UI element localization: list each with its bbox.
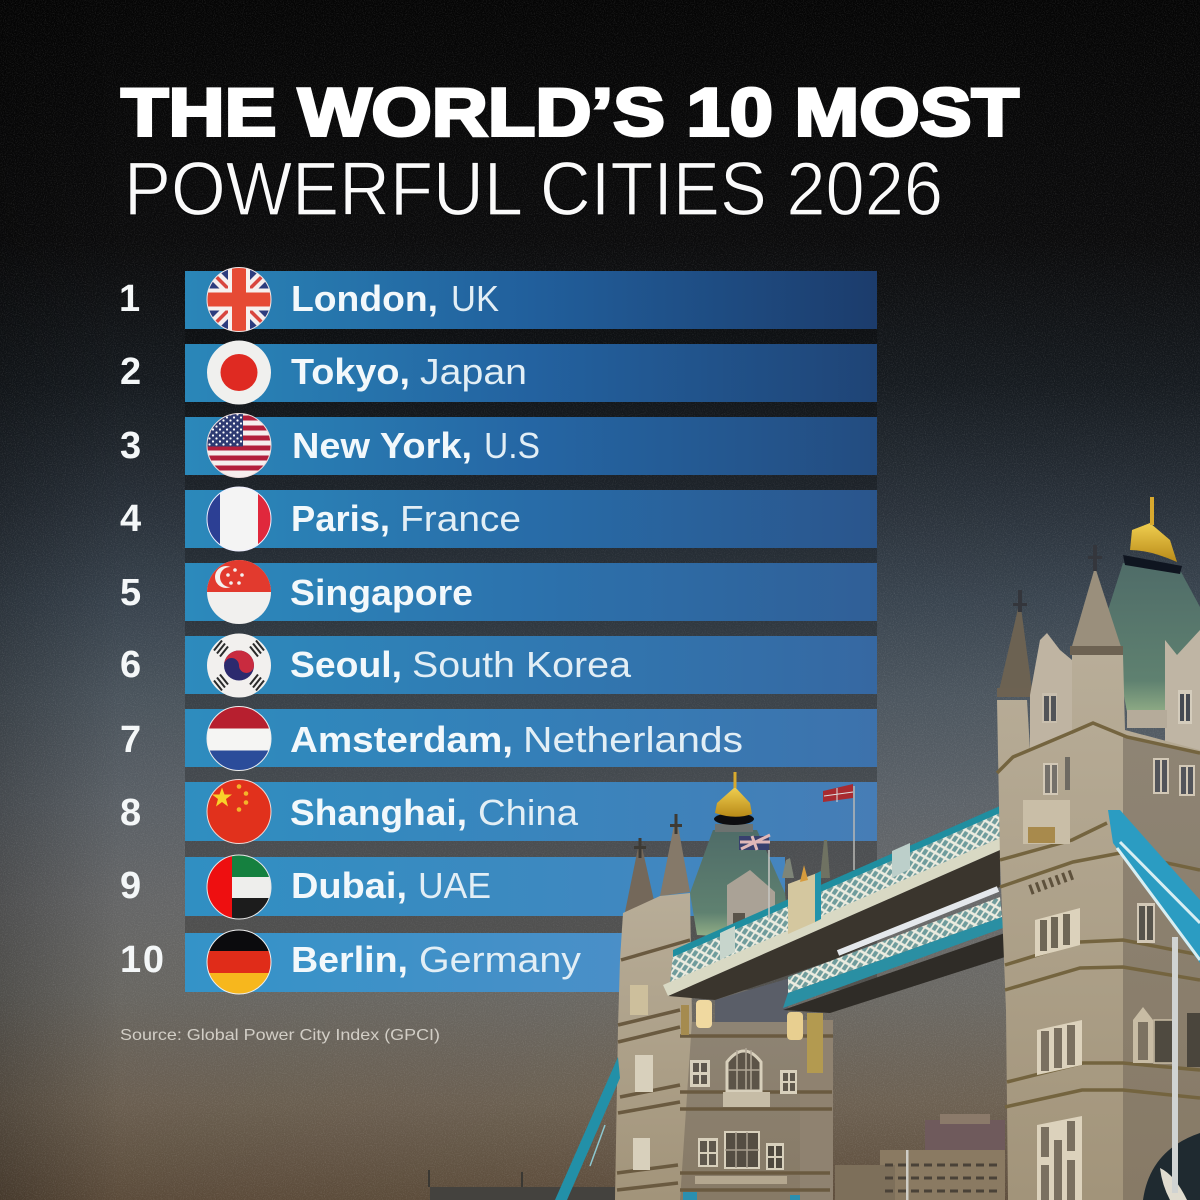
right tower green roof [1108,563,1200,720]
right tower lower windows [1035,903,1200,1200]
upper walkway [663,806,1000,1000]
row 8 Shanghai [120,780,579,844]
row 4 Paris: Paris, [291,498,390,539]
row 5 Singapore [120,560,473,624]
left tower small spires [625,814,830,912]
row 2 Tokyo [120,340,527,404]
row 4 Paris: 4 [120,498,141,540]
right tower spires [997,545,1123,697]
illustration: Tower Bridge [429,497,1200,1200]
row 3 New York: U.S [484,425,540,466]
right tower body [997,655,1200,1200]
row 7 Amsterdam: Netherlands [523,719,743,760]
title line 2: POWERFUL CITIES 2026 [124,147,943,232]
flag: United Arab Emirates [207,855,271,919]
shadow band behind bars [185,272,877,990]
row 2 Tokyo: 2 [120,351,141,393]
row 3 New York: 3 [120,425,141,467]
source note: Source: Global Power City Index (GPCI) [120,1027,440,1044]
row 7 Amsterdam: Amsterdam, [290,719,513,760]
panel: ranked list [119,266,743,994]
left tower corner turret [615,893,692,1200]
flag: United States [207,414,271,478]
right tower darker face [1123,737,1200,1200]
row 9 Dubai: Dubai, [291,865,407,906]
left tower masonry panel [630,985,648,1015]
left tower corner column [800,1020,833,1200]
row 3 New York [120,414,540,478]
arch under the right tower [1143,1133,1200,1200]
flag: United Kingdom [205,266,273,334]
row 6 Seoul: South Korea [412,644,632,685]
row 2 Tokyo: Japan [420,351,527,392]
flag: Japan [207,340,271,404]
row 7 Amsterdam: 7 [120,719,141,761]
upper walkway deck edge [663,838,1000,996]
flag: Union Jack on pole [739,835,770,920]
row 1 London: 1 [119,278,140,320]
left tower slate section [715,978,790,1024]
lower walkway white roof line [838,889,998,953]
white foreground sculpture [1160,1168,1187,1200]
row 3 New York: New York, [292,425,472,466]
right tower [997,497,1200,1200]
right tower frieze [1030,874,1074,890]
flag: Germany [207,930,271,994]
left tower lamps [681,1000,823,1073]
left tower windows [633,1048,797,1184]
row 6 Seoul: Seoul, [290,644,402,685]
walkway posts [720,843,910,960]
row 10 Berlin: Berlin, [291,939,408,980]
lower walkway lattice [788,897,1002,993]
left tower [615,772,833,1200]
teal pieces at tower foot [683,1192,800,1200]
row 5 Singapore: Singapore [290,572,473,613]
title [121,74,1019,232]
row 5 Singapore: 5 [120,572,141,614]
right tower crown [1123,497,1182,574]
row 8 Shanghai: Shanghai, [290,792,467,833]
row 2 Tokyo: Tokyo, [291,351,410,392]
row 10 Berlin: Germany [419,939,581,980]
row 9 Dubai: UAE [418,865,491,906]
arched central window [727,1051,761,1091]
row 9 Dubai: 9 [120,865,141,907]
row 4 Paris [120,487,521,551]
upper walkway lattice [670,810,1000,983]
left tower body [670,1022,833,1200]
row 6 Seoul: 6 [120,644,141,686]
small flags [739,784,854,920]
right tower upper windows [1042,690,1195,796]
left tower roof and crown [690,772,790,940]
row 1 London [119,266,499,334]
right tower balcony [1023,800,1070,844]
left suspension cable [555,1057,620,1200]
upper walkway teal rail [673,806,1000,957]
lower walkway underside [783,933,1005,1013]
distant buildings [429,1114,1005,1200]
flag: China [207,780,271,844]
lower walkway teal side [783,917,1003,1008]
row 4 Paris: France [400,498,521,539]
row 10 Berlin [120,930,581,994]
row 10 Berlin: 10 [120,939,164,981]
flag: Netherlands [207,706,271,770]
lamp post [1172,937,1178,1193]
title line 1: THE WORLD’S 10 MOST [121,74,1019,150]
right suspension cable [1108,810,1200,963]
flag: St George on pole [823,784,854,870]
flag: France [207,487,271,551]
flag: South Korea [207,634,271,698]
right tower cornices [997,723,1200,1107]
row 6 Seoul [120,634,632,698]
row 1 London: UK [451,278,499,319]
row 8 Shanghai: 8 [120,792,141,834]
row 8 Shanghai: China [478,792,579,833]
row 9 Dubai [120,855,491,919]
row 7 Amsterdam [120,706,743,770]
right tower gables [1030,630,1200,760]
flag: Singapore [207,560,271,624]
upper walkway underside [668,850,1000,1000]
ranking bars [185,271,877,992]
lower walkway [783,889,1005,1013]
row 1 London: London, [291,278,438,319]
